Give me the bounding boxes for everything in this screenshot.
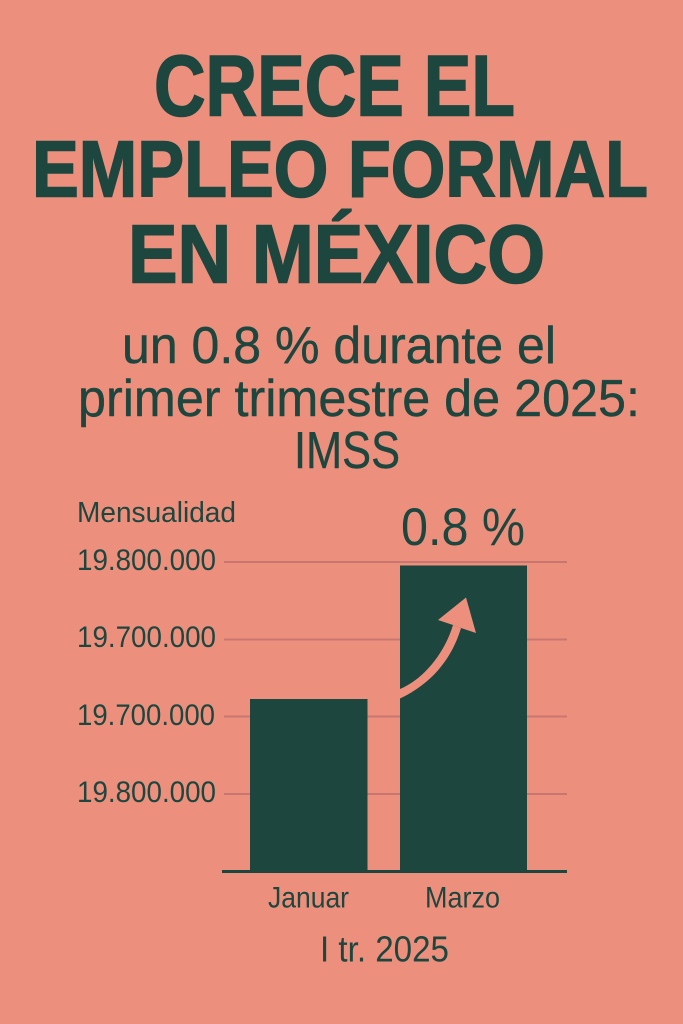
y-axis title: Mensualidad (77, 497, 236, 529)
y-axis labels: 19.800.000 (77, 544, 216, 577)
subtitle: primer trimestre de 2025: (78, 370, 640, 428)
subtitle: un 0.8 % durante el (122, 317, 556, 375)
y-axis labels (77, 544, 216, 809)
subtitle: IMSS (294, 422, 400, 480)
value label: 0.8 %: 0.8 % (401, 498, 525, 557)
bar chart (77, 497, 567, 970)
title: EN MÉXICO (128, 208, 545, 300)
y-axis labels: 19.700.000 (77, 699, 215, 732)
icon: growth arrow (400, 598, 476, 698)
y-axis labels: 19.800.000 (77, 776, 216, 809)
period label: I tr. 2025 (320, 928, 449, 970)
title (32, 38, 648, 300)
title: CRECE EL (154, 38, 515, 134)
y-axis labels: 19.700.000 (77, 621, 216, 654)
x-axis baseline (222, 870, 567, 873)
bar: Januar (250, 699, 368, 871)
bar: Marzo (400, 566, 527, 872)
subtitle (78, 317, 640, 480)
x-axis labels: Januar (268, 882, 349, 914)
bar chart: Marzo (425, 882, 500, 914)
